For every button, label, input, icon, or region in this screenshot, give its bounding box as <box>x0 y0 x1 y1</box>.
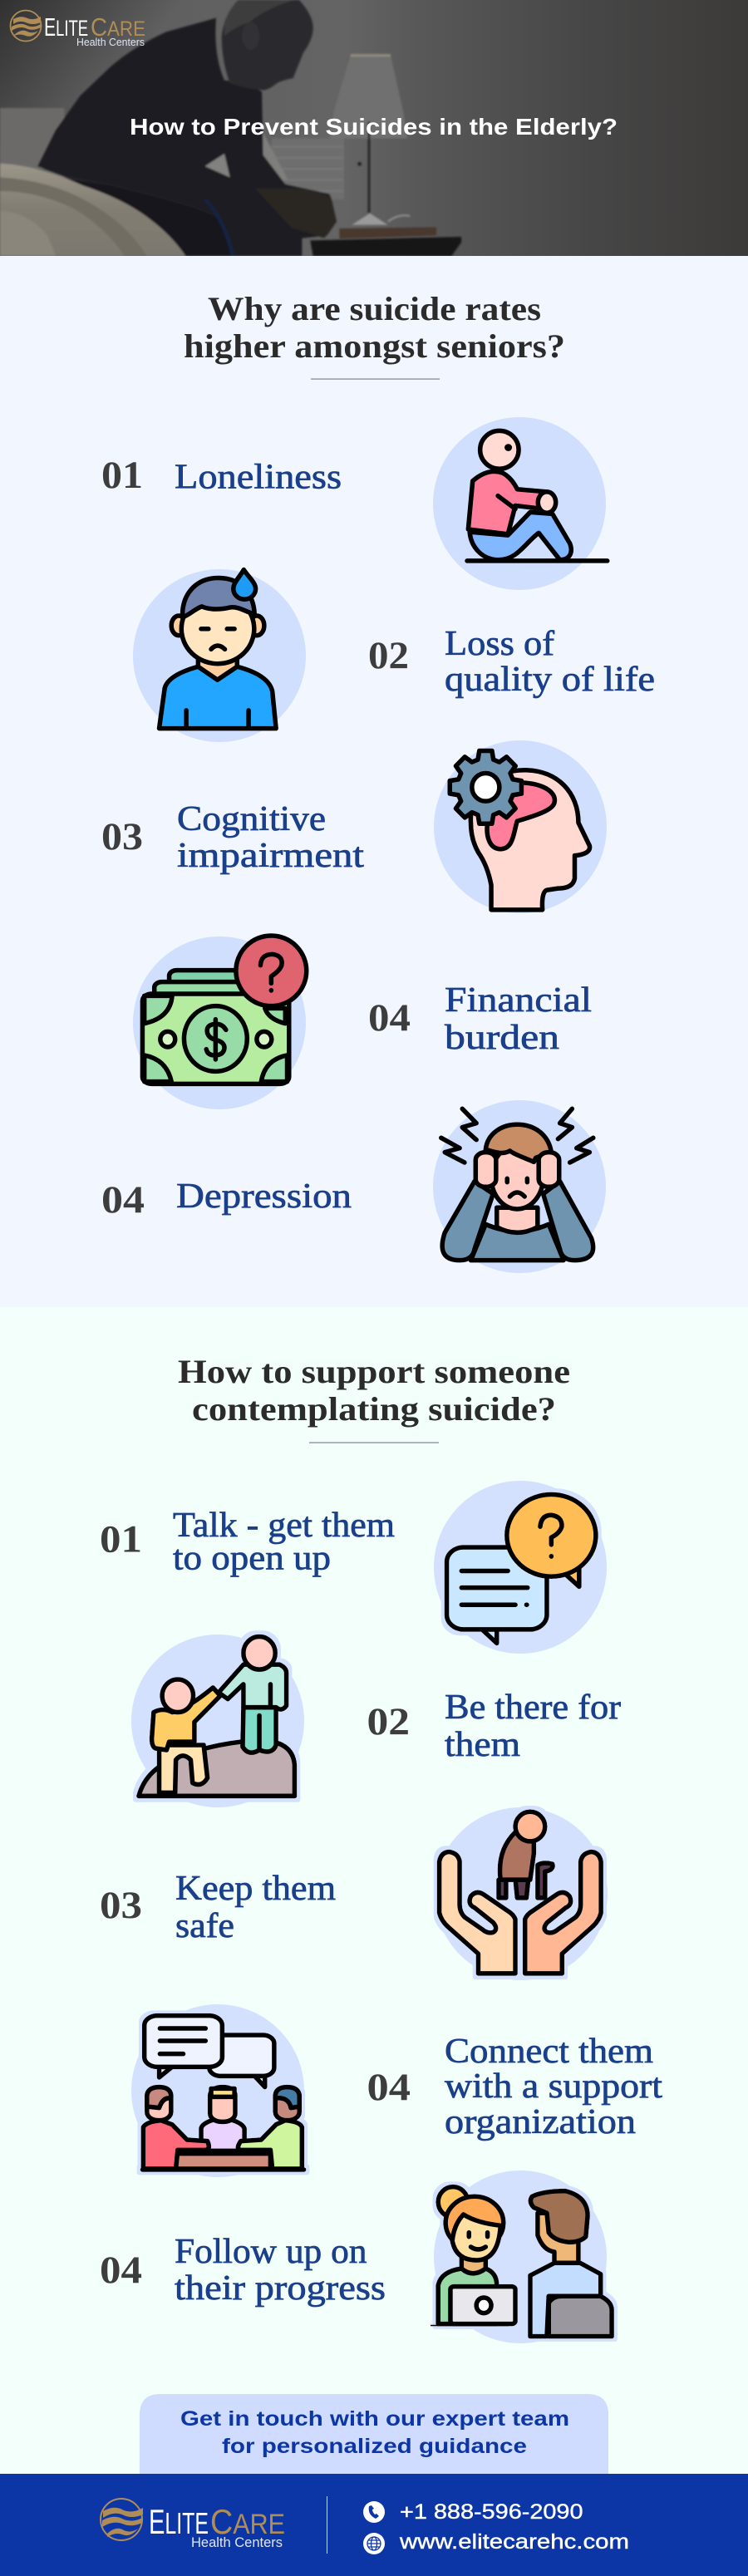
item 03: cognitive impairment: impairment <box>177 837 364 875</box>
item 01: loneliness: 01 <box>101 454 143 497</box>
item 02: be there for them: them <box>445 1726 520 1764</box>
callout: get in touch: for personalized guidance <box>222 2435 527 2458</box>
item 04: financial burden: 04 <box>368 996 411 1040</box>
item 03: cognitive impairment: Cognitive <box>177 800 326 838</box>
item 04: connect with a support organization: with a support <box>445 2067 662 2106</box>
item 02: loss of quality of life: Loss of <box>445 625 554 663</box>
item 05: follow up on progress: 04 <box>100 2249 142 2292</box>
item 05: depression: 04 <box>101 1178 145 1222</box>
item 03: keep them safe <box>100 1870 336 1945</box>
icon: speech bubbles with question mark <box>434 1481 607 1654</box>
item 04: financial burden <box>368 981 592 1057</box>
item 05: depression: Depression <box>176 1177 352 1216</box>
item 04: financial burden: Financial <box>445 981 592 1020</box>
item 02: be there for them: Be there for <box>445 1689 621 1727</box>
heading: how to support someone: contemplating suicide? <box>192 1390 556 1428</box>
item 04: connect with a support organization <box>367 2033 662 2141</box>
logo: header EliteCare <box>10 10 145 48</box>
logo: footer EliteCare: ELITE <box>149 2502 209 2541</box>
logo: header EliteCare: ELITE <box>44 12 88 42</box>
item 01: talk: to open up <box>173 1539 331 1577</box>
item 01: loneliness: Loneliness <box>175 459 342 497</box>
panel: footer <box>0 2474 748 2576</box>
item 04: financial burden: burden <box>445 1019 559 1057</box>
item 05: follow up on progress: their progress <box>175 2269 386 2308</box>
item 05: follow up on progress: Follow up on <box>175 2233 367 2271</box>
item 03: keep them safe: safe <box>175 1907 234 1945</box>
item 01: talk: Talk - get them <box>173 1507 395 1545</box>
icon: sad man with sweat drop <box>133 569 306 742</box>
item 01: talk: 01 <box>100 1517 142 1561</box>
icon: counselor with laptop and client <box>431 2170 612 2343</box>
logo: header EliteCare: CARE <box>91 12 145 42</box>
title: How to Prevent Suicides in the Elderly? <box>130 114 618 140</box>
item 03: cognitive impairment: 03 <box>101 815 143 858</box>
logo: footer EliteCare: CARE <box>210 2502 285 2541</box>
icon: group meeting with speech bubbles <box>131 2004 304 2177</box>
website: www.elitecarehc.com <box>399 2530 629 2554</box>
callout: get in touch <box>140 2394 608 2474</box>
item 03: keep them safe: 03 <box>100 1884 142 1927</box>
logo: footer EliteCare: Health Centers <box>191 2534 283 2550</box>
item 02: loss of quality of life: 02 <box>368 634 409 677</box>
panel: why suicide rates are higher <box>0 256 748 1307</box>
heading: how to support someone <box>178 1353 570 1443</box>
item 02: be there for them <box>367 1689 621 1764</box>
item 03: cognitive impairment <box>101 800 364 875</box>
photo: elderly man sitting on bed beside a lamp <box>0 0 748 256</box>
heading: how to support someone: How to support someone <box>178 1353 570 1390</box>
panel: header photo banner <box>0 0 748 256</box>
callout: get in touch: Get in touch with our expert team <box>180 2407 569 2431</box>
item 05: depression <box>101 1177 352 1222</box>
item 02: be there for them: 02 <box>367 1700 410 1743</box>
item 01: talk <box>100 1507 395 1577</box>
item 02: loss of quality of life <box>368 625 655 699</box>
item 05: follow up on progress <box>100 2233 386 2308</box>
icon: person sitting alone <box>433 417 608 590</box>
item 04: connect with a support organization: 04 <box>367 2066 411 2109</box>
logo: header EliteCare: Health Centers <box>76 36 145 48</box>
icon: globe <box>363 2533 385 2554</box>
icon: hands holding an elderly person <box>435 1807 608 1980</box>
item 03: keep them safe: Keep them <box>175 1870 336 1908</box>
panel: how to support someone <box>0 1307 748 2474</box>
icon: person helping another climb <box>131 1635 304 1807</box>
item 01: loneliness <box>101 454 342 497</box>
heading: why suicide rates <box>184 290 565 380</box>
icon: phone <box>363 2501 385 2523</box>
icon: head with gear <box>434 740 607 913</box>
item 04: connect with a support organization: organization <box>445 2103 636 2141</box>
item 04: connect with a support organization: Connect them <box>445 2033 653 2071</box>
heading: why suicide rates: Why are suicide rates <box>208 290 541 327</box>
heading: why suicide rates: higher amongst seniors? <box>184 327 565 365</box>
icon: money with question mark <box>133 936 307 1109</box>
logo: footer EliteCare <box>101 2499 285 2550</box>
item 02: loss of quality of life: quality of life <box>445 661 655 699</box>
icon: stressed man holding head <box>433 1100 606 1273</box>
phone number: +1 888-596-2090 <box>400 2500 583 2524</box>
